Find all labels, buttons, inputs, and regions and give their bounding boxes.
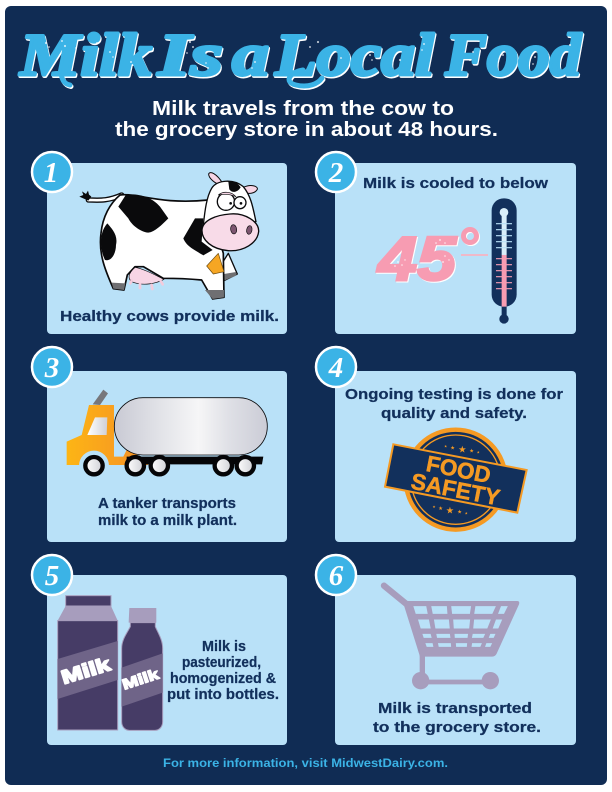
footer: For more information, visit MidwestDairy.com. [163, 758, 448, 770]
icon: food safety seal: ★ [450, 446, 455, 452]
number badge 2 [316, 152, 356, 192]
panel: step 1 cows [47, 163, 287, 334]
subtitle [115, 98, 498, 141]
icon: food safety seal: ★ [458, 444, 467, 455]
icon: milk bottle: Milk [121, 666, 162, 694]
icon: milk carton: Milk [59, 654, 113, 689]
title: Milk [20, 24, 153, 90]
caption: milk to a milk plant. [98, 513, 237, 529]
caption: put into bottles. [167, 687, 279, 703]
caption: homogenized & [170, 671, 277, 687]
caption: pasteurized, [182, 655, 261, 671]
icon: food safety seal: ★ [457, 510, 462, 516]
icon: food safety seal: ★ [465, 511, 469, 515]
title: Is [158, 24, 224, 90]
panel: step 3 tanker [47, 371, 287, 542]
number badge 1: 1 [44, 157, 58, 189]
title: a [233, 24, 270, 90]
caption [373, 701, 541, 736]
icon: food safety seal: ★ [469, 449, 474, 455]
panel: step 5 bottling [47, 575, 287, 745]
45 degrees: 45 [376, 225, 458, 294]
number badge 1 [32, 152, 72, 192]
caption: Milk is transported [378, 701, 532, 717]
icon: food safety seal: SAFETY [409, 468, 502, 510]
panel: step 2 cooling [335, 163, 576, 334]
caption: Milk is cooled to below [363, 176, 549, 192]
number badge 5 [32, 555, 72, 595]
45 degrees [376, 225, 488, 295]
subtitle: the grocery store in about 48 hours. [115, 119, 498, 141]
icon: shopping cart [384, 586, 519, 689]
45 degrees: 45 [377, 226, 459, 295]
icon: milk bottle [121, 608, 163, 730]
caption: to the grocery store. [373, 720, 541, 736]
panel: step 6 grocery [335, 575, 576, 745]
title: Is [157, 22, 223, 88]
number badge 3: 3 [44, 352, 59, 384]
icon: thermometer [492, 198, 517, 324]
icon: food safety seal: ★ [432, 505, 436, 509]
title: Food [445, 24, 583, 90]
icon: cow [79, 173, 259, 299]
caption [98, 496, 237, 529]
caption: A tanker transports [98, 496, 236, 512]
number badge 5: 5 [45, 560, 59, 592]
title: Milk [19, 22, 152, 88]
title: Food [444, 22, 582, 88]
number badge 3 [32, 347, 72, 387]
subtitle: Milk travels from the cow to [152, 98, 454, 120]
caption: Milk is [202, 639, 246, 655]
icon: tanker truck [67, 390, 267, 474]
icon: food safety seal [385, 430, 527, 530]
caption [167, 639, 279, 703]
title: a [232, 22, 269, 88]
icon: food safety seal: ★ [438, 506, 443, 512]
number badge 6: 6 [329, 560, 344, 592]
number badge 6 [316, 555, 356, 595]
number badge 4 [316, 347, 356, 387]
caption: quality and safety. [381, 406, 527, 422]
number badge 4: 4 [328, 352, 343, 384]
caption [345, 387, 563, 422]
icon: food safety seal: ★ [444, 444, 448, 448]
title: Local [275, 24, 435, 90]
icon: milk carton [58, 596, 118, 730]
caption: Ongoing testing is done for [345, 387, 563, 403]
icon: food safety seal: ★ [477, 451, 481, 455]
icon: food safety seal: ★ [446, 505, 454, 516]
title: Local [274, 22, 434, 88]
title [19, 22, 583, 90]
caption: Healthy cows provide milk. [60, 309, 279, 325]
number badge 2: 2 [328, 157, 343, 189]
icon: food safety seal: FOOD [424, 450, 493, 488]
panel: step 4 testing [335, 371, 576, 542]
